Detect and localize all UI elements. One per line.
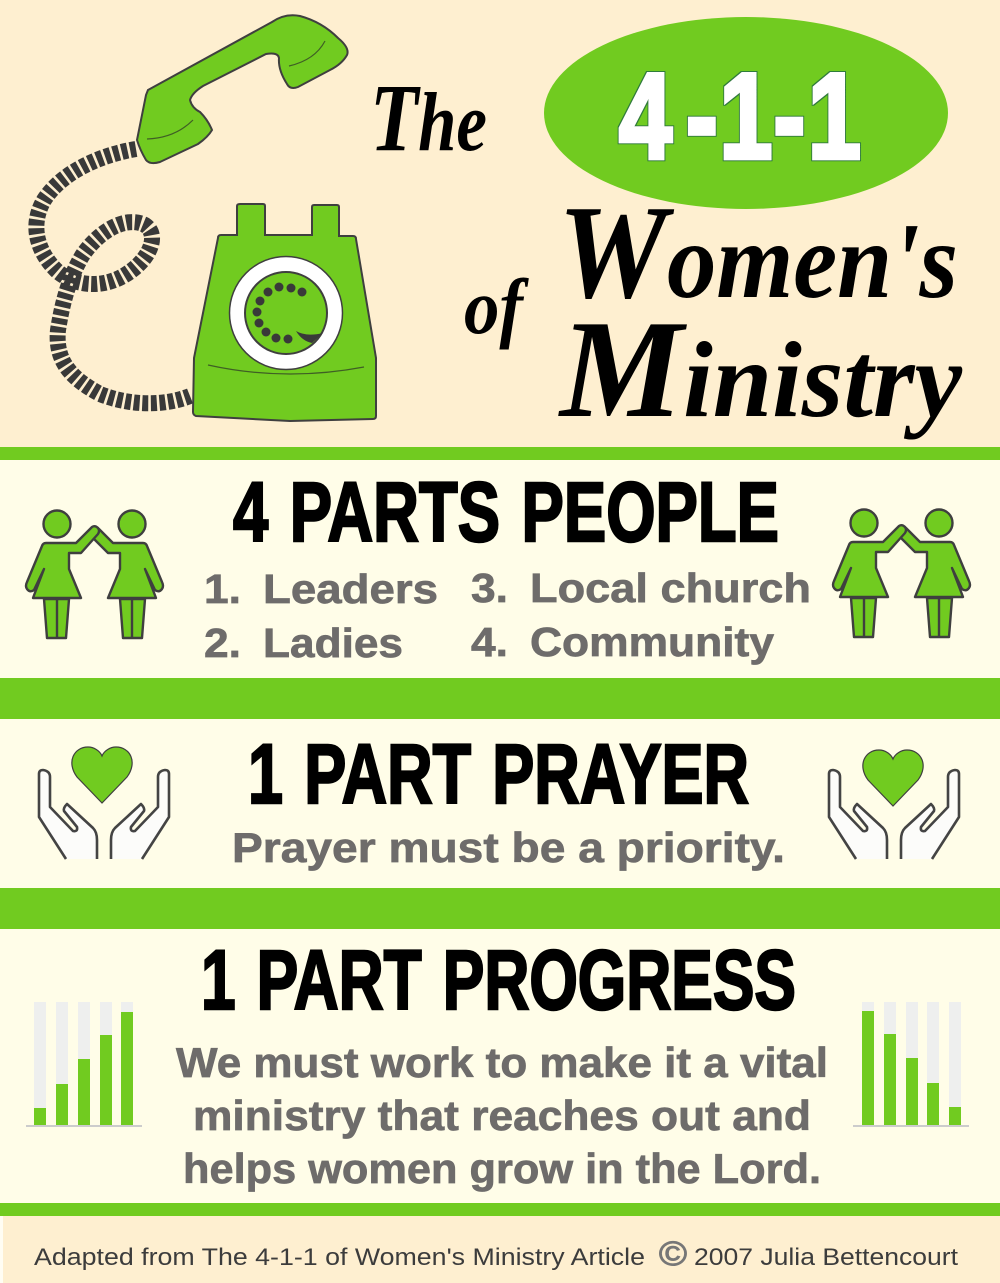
heading: 1 part progress: 1 PART PROGRESS: [201, 933, 796, 1027]
list: four parts: Community: [530, 619, 774, 665]
title: Women's: Women's: [558, 178, 958, 326]
list: four parts: 3.: [471, 565, 508, 611]
header: telephone illustration: [36, 15, 376, 421]
panel: 4 parts people: [0, 460, 1000, 678]
icon: two women right: [833, 510, 970, 637]
icon: coiled phone cord: [36, 149, 190, 403]
icon: hands and heart left: [39, 747, 169, 859]
band: green bottom rule: [0, 1203, 1000, 1216]
band: green top rule: [0, 447, 1000, 460]
heading: 4 parts people: 4 PARTS PEOPLE: [233, 465, 779, 559]
icon: copyright: ©: [659, 1235, 687, 1273]
text: prayer priority: Prayer must be a priority.: [232, 824, 785, 871]
icon: two women left: [26, 510, 163, 638]
icon: handset: [137, 15, 348, 163]
title: Ministry: Ministry: [558, 292, 963, 447]
list: four parts: Local church: [530, 565, 811, 611]
heading: 1 part prayer: 1 PART PRAYER: [248, 727, 749, 821]
chart: falling bars right: [853, 1002, 969, 1127]
badge: 4-1-1 oval: [544, 17, 948, 209]
badge: 4-1-1 oval: 4-1-1: [619, 49, 861, 185]
footer: credit line: 2007 Julia Bettencourt: [694, 1244, 958, 1271]
footer: credit line: [0, 1216, 1000, 1283]
icon: rotary phone base: [193, 204, 376, 421]
band: green divider: [0, 678, 1000, 719]
list: four parts: Ladies: [263, 620, 403, 666]
list: four parts: 2.: [204, 620, 241, 666]
text: progress description: helps women grow in the Lord.: [183, 1145, 821, 1192]
list: four parts: [204, 565, 811, 666]
list: four parts: 1.: [204, 566, 241, 612]
panel: 1 part prayer: [0, 719, 1000, 888]
band: green divider: [0, 888, 1000, 929]
list: four parts: 4.: [471, 619, 508, 665]
text: progress description: ministry that reaches out and: [193, 1092, 811, 1139]
footer: credit line: Adapted from The 4-1-1 of Women's Ministry Article: [34, 1244, 645, 1271]
list: four parts: Leaders: [263, 566, 438, 612]
chart: rising bars left: [26, 1002, 142, 1127]
panel: 1 part progress: [0, 929, 1000, 1203]
text: progress description: [176, 1039, 828, 1192]
text: progress description: We must work to make it a vital: [176, 1039, 828, 1086]
icon: hands and heart right: [829, 750, 959, 859]
title: of: of: [464, 263, 529, 350]
title: The: The: [370, 64, 487, 171]
